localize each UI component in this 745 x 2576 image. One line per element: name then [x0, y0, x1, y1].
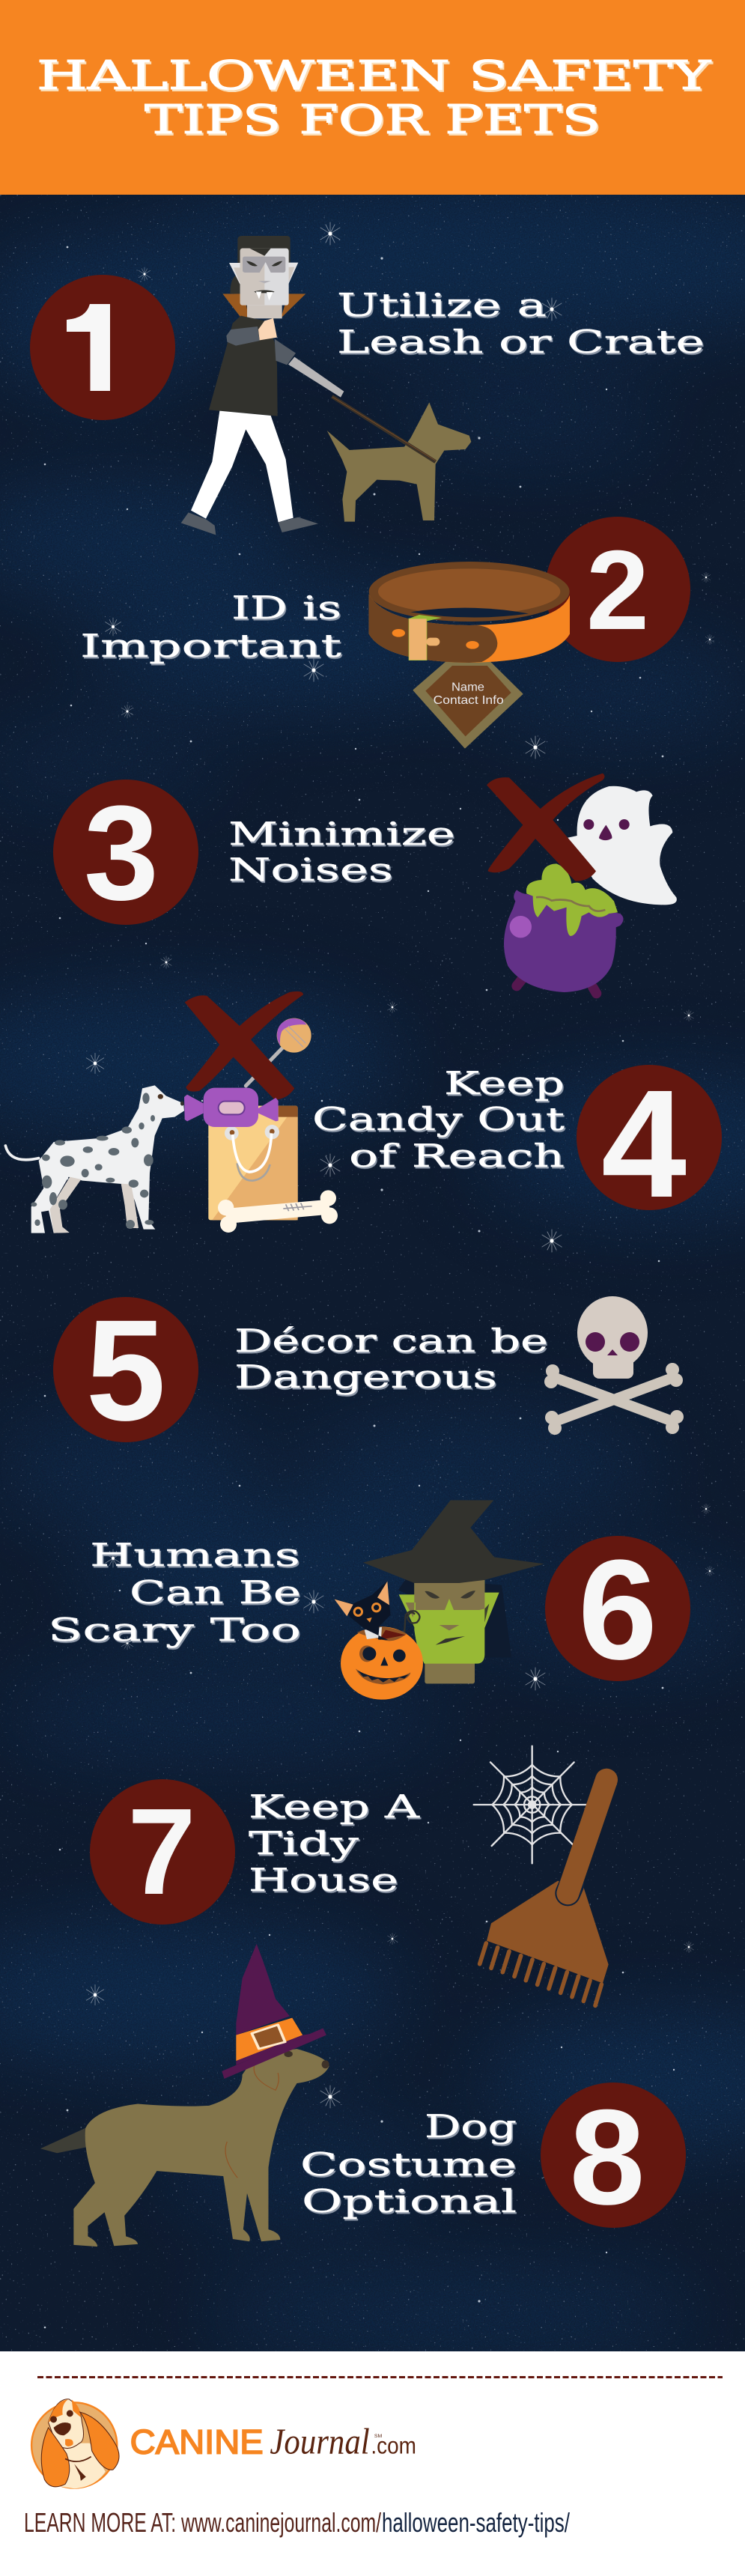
tip text: of Reach — [349, 1137, 565, 1174]
logo wordmark: SM — [374, 2434, 382, 2439]
tip text — [48, 1537, 301, 1648]
title — [37, 53, 711, 143]
tip text: Tidy — [249, 1825, 359, 1862]
tip 8: dog costume optional — [40, 1944, 686, 2247]
title: HALLOWEEN SAFETY — [37, 53, 711, 99]
tip text — [249, 1788, 420, 1898]
tip text — [300, 2108, 517, 2220]
number badge 8 — [541, 2082, 686, 2233]
tip text: Keep A — [249, 1788, 420, 1825]
tip text: Leash or Crate — [337, 323, 705, 360]
learn more link text: LEARN MORE AT: www.caninejournal.com/ — [24, 2507, 381, 2538]
tip text: Can Be — [130, 1574, 301, 1611]
logo wordmark: Journal — [270, 2422, 370, 2462]
tip 2: ID is important — [80, 517, 690, 747]
tip text: Keep — [444, 1065, 565, 1102]
number badge 3: 3 — [84, 778, 159, 929]
tip 3: minimize noises — [53, 774, 677, 994]
tip 5: decor can be dangerous — [53, 1289, 684, 1450]
title: TIPS FOR PETS — [145, 97, 600, 143]
number badge 6 — [545, 1531, 690, 1689]
logo: Canine Journal — [31, 2399, 416, 2488]
panel: title banner — [0, 0, 745, 195]
number badge 7: 7 — [127, 1783, 196, 1920]
logo wordmark: CANINE — [130, 2423, 264, 2461]
icon: dog collar with ID tag — [369, 562, 570, 747]
tip text: Costume — [300, 2146, 517, 2183]
tip text: Dog — [425, 2108, 517, 2145]
tip text — [337, 287, 705, 360]
number badge 6: 6 — [578, 1531, 657, 1689]
logo wordmark: .com — [371, 2432, 416, 2459]
icon: dog collar with ID tag: Name — [451, 681, 484, 693]
number badge 8: 8 — [570, 2082, 645, 2233]
panel: footer — [0, 2351, 745, 2576]
tip 6: humans can be scary too — [48, 1500, 690, 1700]
icon: dog wearing witch hat — [40, 1944, 329, 2247]
icon: rake and spiderweb — [474, 1746, 609, 2005]
tip text: Utilize a — [337, 287, 547, 323]
tip 4: keep candy out of reach — [5, 991, 722, 1233]
number badge 2 — [545, 517, 690, 662]
tip text: ID is — [231, 589, 341, 626]
tip text — [80, 589, 341, 664]
logo wordmark — [130, 2422, 416, 2462]
number badge 7 — [90, 1779, 235, 1925]
icon: dog collar with ID tag: Contact Info — [434, 694, 504, 707]
icon: dalmatian sniffing candy bag with bone and lollipop — [5, 991, 338, 1233]
number badge 4: 4 — [601, 1058, 687, 1230]
icon: vampire walking dog on leash — [181, 236, 471, 535]
icon: witch head, black cat and jack-o-lantern — [335, 1500, 544, 1700]
tip text — [312, 1065, 565, 1174]
icon: skull and crossbones — [544, 1296, 684, 1435]
tip text: Noises — [228, 851, 393, 888]
number badge 5: 5 — [86, 1289, 165, 1450]
number badge 4 — [577, 1058, 722, 1230]
number badge 5 — [53, 1289, 198, 1450]
learn more link text: halloween-safety-tips/ — [382, 2507, 570, 2538]
tip 1: leash or crate — [30, 236, 705, 535]
tip text: Humans — [90, 1537, 300, 1573]
tip text: House — [249, 1862, 398, 1898]
icon: ghost, cauldron and red X — [487, 774, 677, 994]
tip text: Décor can be — [234, 1322, 548, 1359]
tip 7: keep a tidy house — [90, 1746, 609, 2005]
tip text: Important — [80, 628, 341, 664]
tip text: Candy Out — [312, 1101, 565, 1137]
tip text: Dangerous — [234, 1358, 497, 1395]
tip text: Optional — [302, 2183, 517, 2220]
number badge 1: 1 — [59, 277, 130, 418]
tip text — [228, 815, 455, 888]
number badge 2: 2 — [586, 526, 649, 653]
tip text — [234, 1322, 548, 1395]
tip text: Minimize — [228, 815, 455, 852]
number badge 3 — [53, 778, 198, 929]
number badge 1 — [30, 275, 175, 420]
tip text: Scary Too — [48, 1611, 301, 1648]
